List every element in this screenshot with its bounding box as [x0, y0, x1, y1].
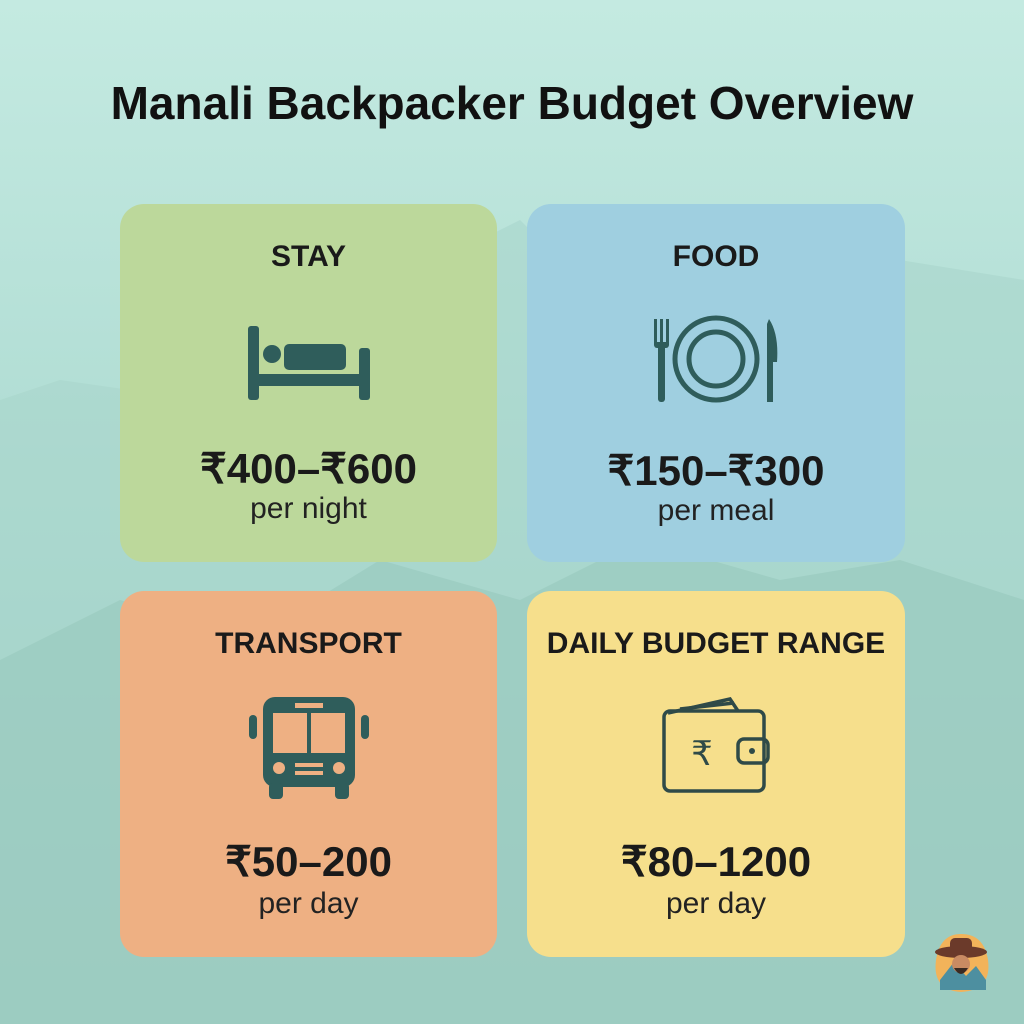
panel: food: [527, 204, 905, 562]
heading: transport: TRANSPORT: [215, 627, 402, 660]
sub: stay: per night: [250, 492, 367, 525]
icon: bus: [249, 697, 369, 799]
title: Manali Backpacker Budget Overview: [111, 77, 913, 129]
icon: plate: [654, 316, 778, 402]
panel: stay: [120, 204, 497, 562]
icon: bed: [248, 326, 370, 400]
icon: wallet: ₹: [691, 735, 713, 773]
price: transport: ₹50–200: [225, 838, 392, 885]
heading: food: FOOD: [673, 240, 759, 273]
sub: food: per meal: [658, 494, 774, 527]
sub: transport: per day: [258, 887, 359, 920]
panel: transport: [120, 591, 497, 957]
sub: daily: per day: [666, 887, 766, 920]
price: stay: ₹400–₹600: [200, 445, 417, 492]
heading: stay: STAY: [271, 240, 346, 273]
panel: daily budget: [527, 591, 905, 957]
logo: traveler: [935, 934, 988, 992]
icon: wallet: [662, 697, 770, 793]
heading: daily: DAILY BUDGET RANGE: [547, 627, 885, 660]
price: food: ₹150–₹300: [608, 447, 824, 494]
price: daily: ₹80–1200: [621, 838, 811, 885]
